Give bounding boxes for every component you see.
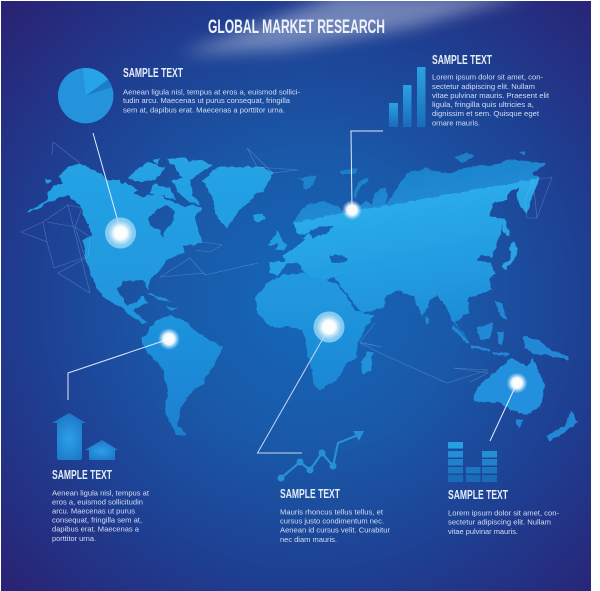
text block: vitae pulvinar mauris. [448, 527, 518, 536]
continent: South America [142, 315, 223, 435]
text block: ligula, fringilla quis ultricies a, [432, 100, 534, 109]
continent: Africa [255, 273, 373, 390]
text block: Lorem ipsum dolor sit amet, con- [448, 508, 560, 518]
panel: top right [389, 53, 549, 128]
text block: Mauris rhoncus tellus tellus, et [280, 508, 383, 516]
text block: vitae pulvinar mauris. Praesent elit [432, 91, 549, 100]
text block [432, 72, 549, 128]
island: Iceland [252, 213, 266, 222]
text block: tudin arcu. Maecenas ut purus consequat, fringilla [123, 96, 291, 105]
text block: eros a, euismod sollicitudin [52, 498, 143, 506]
island: UK [268, 230, 287, 250]
arctic islands [45, 157, 213, 205]
islands: Caribbean [145, 292, 178, 311]
continent: North America [27, 163, 203, 324]
title: GLOBAL MARKET RESEARCH [208, 17, 385, 38]
island: Japan [498, 218, 518, 270]
continent: Australia [473, 358, 545, 415]
light beam [180, 0, 530, 54]
panel: top left [58, 66, 301, 123]
icon: equalizer chart [448, 442, 497, 482]
island: Svalbard [298, 175, 316, 190]
text block: Aenean ligula nisl, tempus at eros a, euismod sollici- [123, 88, 301, 96]
icon: pie chart [58, 68, 113, 123]
text block: Aenean ligula nisl, tempus at [52, 488, 149, 498]
heading: SAMPLE TEXT [280, 487, 340, 501]
panel: bottom left [52, 413, 149, 543]
icon: bar chart [389, 67, 426, 127]
heading: SAMPLE TEXT [432, 53, 492, 67]
world map [27, 151, 578, 441]
network lines [21, 142, 552, 383]
text block [52, 488, 149, 543]
callout: South America pin [68, 328, 180, 400]
text block: porttitor urna. [52, 534, 96, 543]
island: New Guinea [523, 336, 568, 360]
text block [280, 508, 391, 544]
text block: consequat, fringilla sem at, [52, 516, 142, 524]
icon: line chart arrow [278, 431, 364, 482]
text block: sectetur adipiscing elit. Nullam [448, 518, 551, 526]
island: Madagascar [361, 352, 373, 374]
text block: Aenean id cursus velit. Curabitur [280, 526, 391, 534]
text block: sem at, dapibus erat. Maecenas a porttitor urna. [123, 106, 285, 114]
panel: bottom center [278, 431, 391, 544]
callout: North America pin [93, 133, 136, 248]
callout: Russia pin [342, 131, 383, 220]
heading: SAMPLE TEXT [123, 66, 183, 80]
text block [448, 508, 560, 536]
island: Novaya Zemlya [353, 177, 368, 198]
islands: Southeast Asia [425, 300, 510, 356]
island: Tasmania [516, 419, 524, 429]
text block: dapibus erat. Maecenas a [52, 524, 140, 534]
island: Greenland [203, 167, 273, 228]
callout: Australia pin [490, 372, 528, 441]
panel: bottom right [448, 442, 560, 536]
text block: nec diam mauris. [280, 535, 337, 544]
icon: house arrows [52, 413, 118, 460]
continent: Eurasia [270, 160, 547, 342]
heading: SAMPLE TEXT [52, 468, 112, 482]
text block: dignissim et sem. Quisque eget [432, 109, 539, 118]
island: New Zealand [546, 411, 578, 441]
islands: Arctic Russia [340, 151, 526, 175]
callout: Africa pin [258, 312, 344, 453]
text block: Lorem ipsum dolor sit amet, con- [432, 72, 544, 82]
text block: ornare mauris. [432, 118, 480, 128]
text block [123, 88, 301, 114]
text block: sectetur adipiscing elit. Nullam [432, 82, 535, 91]
text block: arcu. Maecenas ut purus [52, 506, 135, 516]
heading: SAMPLE TEXT [448, 488, 508, 502]
text block: cursus justo condimentum nec. [280, 516, 384, 526]
